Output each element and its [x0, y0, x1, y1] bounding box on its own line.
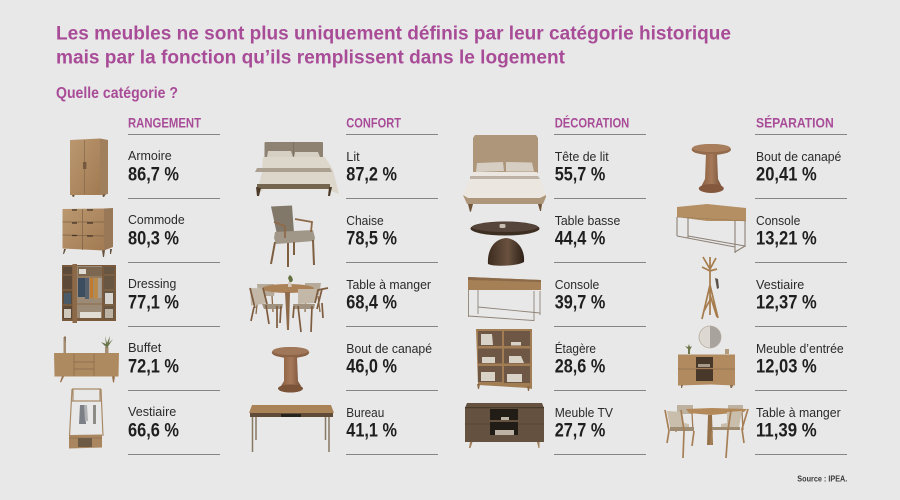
text: console (décoration): Console	[555, 277, 599, 292]
icon: chaise	[271, 206, 315, 267]
heading: rangement: RANGEMENT	[128, 116, 202, 130]
heading: décoration: DÉCORATION	[555, 116, 629, 130]
text: vestiaire (séparation)	[756, 277, 817, 314]
text: console (séparation)	[756, 213, 817, 250]
panel: décoration	[463, 116, 646, 454]
icon: table à manger (séparation)	[665, 405, 748, 458]
text: dressing: 77,1 %	[128, 292, 179, 314]
icon: table à manger (confort)	[250, 275, 328, 332]
text: table à manger (confort)	[346, 277, 432, 314]
text: meuble d'entrée: 12,03 %	[756, 356, 817, 378]
text: table basse: 44,4 %	[555, 228, 605, 250]
text: bout de canapé (confort): 46,0 %	[346, 356, 397, 378]
text: bout de canapé (confort): Bout de canapé	[346, 341, 432, 356]
text: meuble TV	[555, 405, 613, 442]
text: vestiaire: 66,6 %	[128, 420, 179, 442]
icon: étagère	[476, 329, 532, 391]
text: console (décoration): 39,7 %	[555, 292, 605, 314]
panel: confort	[249, 116, 438, 454]
text: bout de canapé (séparation): Bout de canapé	[756, 149, 841, 164]
icon: meuble TV	[465, 403, 544, 448]
text: étagère: 28,6 %	[555, 356, 605, 378]
text: lit: 87,2 %	[346, 164, 397, 186]
text: chaise	[346, 213, 397, 250]
icon: dressing	[62, 264, 116, 323]
text: console (séparation): Console	[756, 213, 800, 228]
text: armoire: Armoire	[128, 148, 172, 163]
text: dressing: Dressing	[128, 276, 176, 291]
text: table basse: Table basse	[555, 213, 620, 228]
icon: bout de canapé (confort)	[272, 347, 309, 392]
icon: console (décoration)	[468, 277, 541, 321]
source: Source : IPEA.	[797, 474, 847, 484]
icon: bout de canapé (séparation)	[692, 144, 731, 193]
text: console (séparation): 13,21 %	[756, 228, 817, 250]
text: chaise: Chaise	[346, 213, 384, 228]
text: commode: 80,3 %	[128, 228, 179, 250]
icon: console (séparation)	[677, 204, 746, 253]
text: tête de lit	[555, 149, 609, 186]
text: buffet: Buffet	[128, 340, 162, 355]
icon: bureau	[249, 405, 334, 452]
text: bout de canapé (séparation)	[756, 149, 841, 186]
panel: séparation	[665, 116, 847, 458]
text: meuble TV: Meuble TV	[555, 405, 613, 420]
title	[56, 22, 731, 68]
text: table à manger (séparation): Table à manger	[756, 405, 841, 420]
text: meuble d'entrée	[756, 341, 844, 378]
text: vestiaire: Vestiaire	[128, 404, 176, 419]
text: lit	[346, 149, 397, 186]
text: commode	[128, 212, 185, 250]
text: table à manger (séparation): 11,39 %	[756, 420, 817, 442]
text: buffet: 72,1 %	[128, 356, 179, 378]
icon: vestiaire (séparation)	[702, 257, 719, 319]
icon: lit	[255, 142, 339, 196]
text: table à manger (confort): 68,4 %	[346, 292, 397, 314]
text: table basse	[555, 213, 620, 250]
text: vestiaire (séparation): 12,37 %	[756, 292, 817, 314]
heading: séparation: SÉPARATION	[756, 116, 834, 130]
text: console (décoration)	[555, 277, 605, 314]
text: meuble d'entrée: Meuble d’entrée	[756, 341, 844, 356]
text: étagère: Étagère	[555, 341, 596, 356]
icon: armoire	[70, 138, 108, 197]
icon: meuble d'entrée	[678, 326, 735, 388]
text: commode: Commode	[128, 212, 185, 227]
text: bureau: 41,1 %	[346, 420, 397, 442]
title: Les meubles ne sont plus uniquement définis par leur catégorie historique	[56, 22, 731, 44]
text: bout de canapé (séparation): 20,41 %	[756, 164, 817, 186]
text: table à manger (confort): Table à manger	[346, 277, 432, 292]
text: tête de lit: 55,7 %	[555, 164, 605, 186]
subtitle: Quelle catégorie ?	[56, 85, 178, 102]
icon: buffet	[54, 336, 119, 382]
text: armoire: 86,7 %	[128, 164, 179, 186]
panel: rangement	[54, 116, 220, 454]
icon: table basse	[470, 222, 540, 266]
text: vestiaire (séparation): Vestiaire	[756, 277, 804, 292]
text: chaise: 78,5 %	[346, 228, 397, 250]
text: bureau	[346, 405, 397, 442]
text: lit: Lit	[346, 149, 360, 164]
text: buffet	[128, 340, 179, 378]
text: meuble TV: 27,7 %	[555, 420, 605, 442]
icon: vestiaire	[69, 389, 103, 448]
text: étagère	[555, 341, 605, 378]
icon: commode	[62, 208, 113, 257]
icon: tête de lit	[463, 135, 546, 212]
title: mais par la fonction qu’ils remplissent dans le logement	[56, 46, 565, 68]
heading: confort: CONFORT	[346, 116, 402, 130]
text: bout de canapé (confort)	[346, 341, 432, 378]
text: armoire	[128, 148, 179, 186]
text: vestiaire	[128, 404, 179, 442]
text: table à manger (séparation)	[756, 405, 841, 442]
text: tête de lit: Tête de lit	[555, 149, 609, 164]
text: dressing	[128, 276, 179, 314]
text: bureau: Bureau	[346, 405, 384, 420]
